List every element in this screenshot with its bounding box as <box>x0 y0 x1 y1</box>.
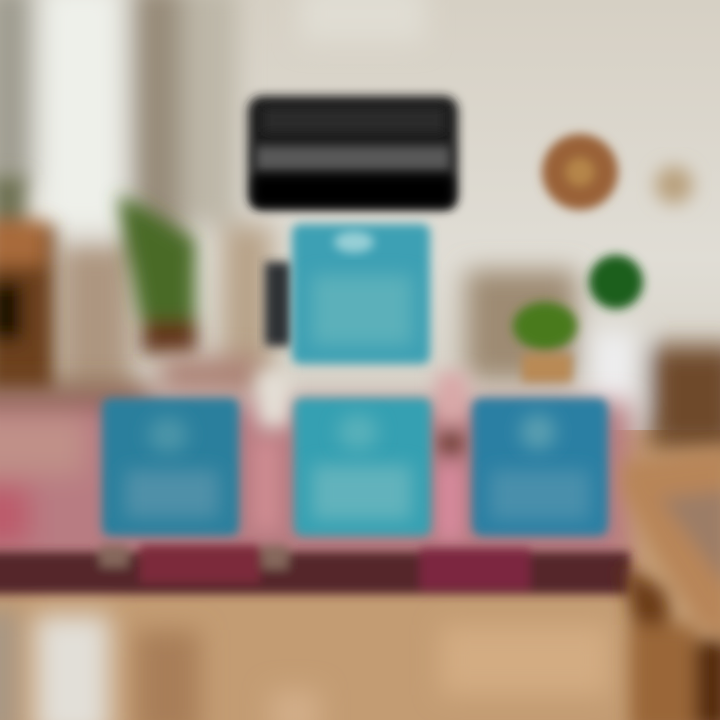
wooden floor <box>0 610 610 720</box>
plant behind title <box>118 195 197 354</box>
wall background <box>0 0 720 430</box>
patterned rug <box>0 358 630 572</box>
panel: bottom middle card <box>294 398 431 536</box>
rug border <box>0 545 630 594</box>
window and curtains <box>0 0 425 395</box>
title band: middle line <box>256 146 450 170</box>
panel: title <box>248 96 458 210</box>
panel: bottom right card <box>472 398 608 536</box>
floor light reflection <box>35 615 110 720</box>
round wall clock <box>542 134 618 210</box>
left wooden shelf <box>0 175 55 395</box>
wooden table <box>622 448 720 720</box>
card heading <box>338 414 378 450</box>
card text <box>125 470 219 518</box>
card text <box>312 465 412 520</box>
right plants <box>513 255 643 382</box>
card heading <box>520 414 556 450</box>
title band: top line <box>264 108 444 132</box>
card text <box>312 275 412 345</box>
card heading <box>334 231 374 253</box>
dark object beside top card <box>265 262 291 346</box>
rug gap highlights <box>254 372 468 540</box>
small wall ornament <box>655 166 693 204</box>
sofa and side furniture <box>466 270 720 450</box>
panel: bottom left card <box>102 398 239 536</box>
card text <box>490 470 590 520</box>
title band: bottom line <box>254 176 452 206</box>
floor base <box>0 430 720 720</box>
card heading <box>148 417 188 453</box>
panel: top card <box>292 224 430 364</box>
